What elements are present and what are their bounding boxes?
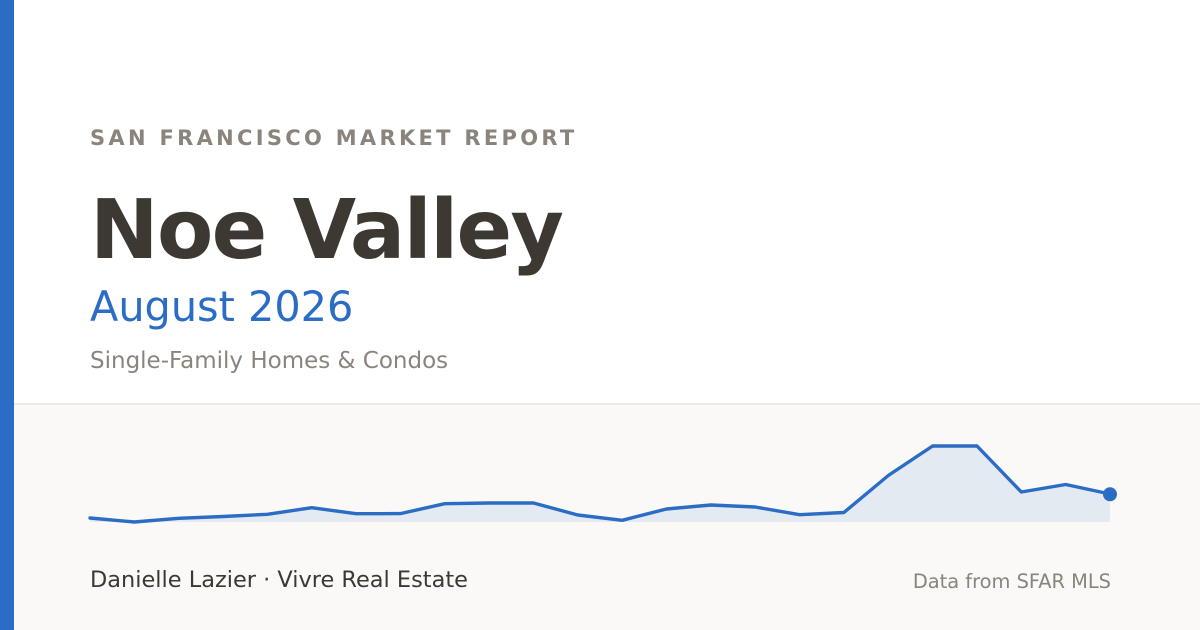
left accent bar [0, 0, 14, 630]
footer panel [0, 403, 1200, 630]
area fill [90, 446, 1110, 522]
agent credit: Danielle Lazier · Vivre Real Estate [90, 567, 468, 593]
property type text: Single-Family Homes & Condos [90, 348, 448, 374]
data source: Data from SFAR MLS [913, 570, 1111, 593]
trend line [90, 446, 1110, 522]
title: Noe Valley [90, 183, 562, 278]
latest value marker [1103, 487, 1117, 501]
date subtitle: August 2026 [90, 283, 353, 331]
eyebrow label: SAN FRANCISCO MARKET REPORT [90, 126, 578, 150]
